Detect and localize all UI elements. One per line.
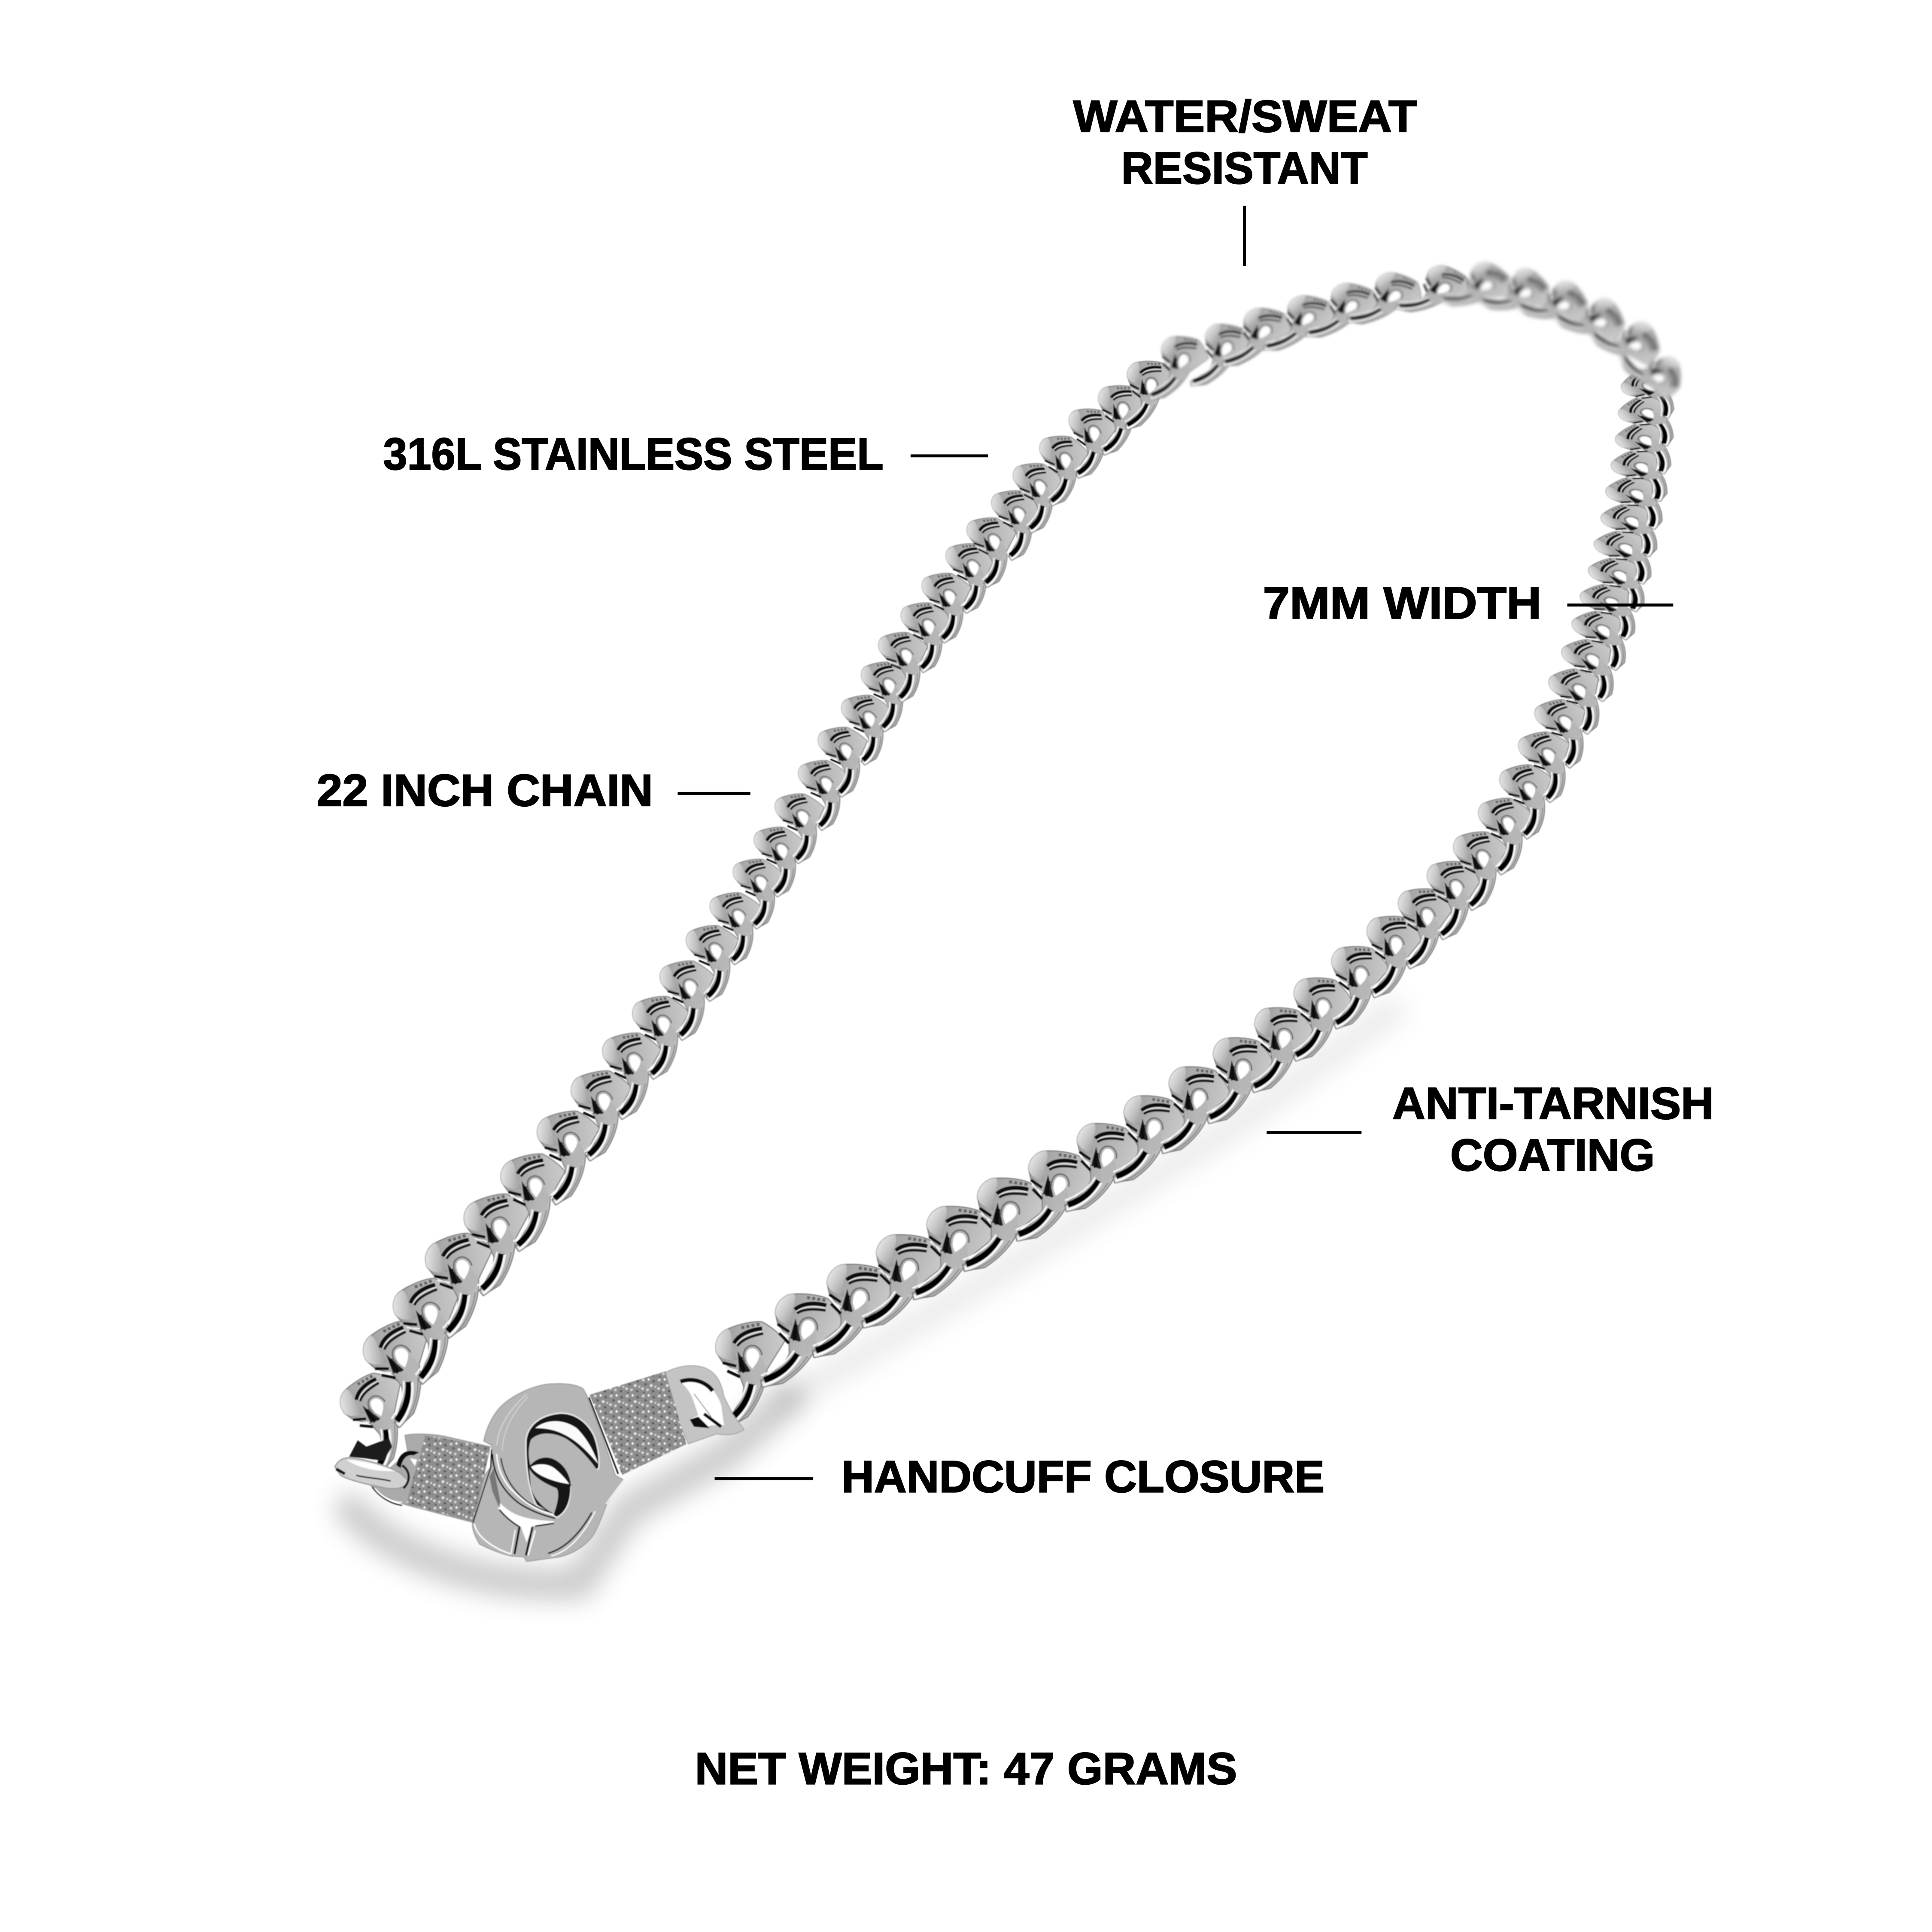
callout: anti-tarnish coating bbox=[1267, 1078, 1714, 1180]
callout: anti-tarnish coating: COATING bbox=[1450, 1130, 1655, 1180]
handcuff rings bbox=[472, 1384, 624, 1561]
clasp soft shadow bbox=[351, 1398, 789, 1584]
chain: right strand bbox=[666, 362, 1702, 1455]
chain soft shadow bbox=[789, 1010, 1392, 1398]
eye highlight bbox=[530, 1464, 570, 1485]
right pad tab and ring opening bbox=[665, 1366, 744, 1444]
callout: anti-tarnish coating: ANTI-TARNISH bbox=[1392, 1078, 1714, 1129]
neck highlight bbox=[498, 1503, 554, 1543]
interlocked ring bbox=[529, 1434, 602, 1520]
ring opening bbox=[526, 1413, 599, 1518]
inner shadow bbox=[489, 1468, 500, 1508]
left textured pad bbox=[406, 1435, 490, 1522]
chain: top curve bbox=[1123, 254, 1482, 425]
net weight caption: NET WEIGHT: 47 GRAMS bbox=[695, 1744, 1237, 1794]
handcuff body bbox=[472, 1384, 623, 1561]
callout: 316L stainless steel: 316L STAINLESS STEEL bbox=[383, 429, 884, 479]
ring bevel lines bbox=[473, 1394, 624, 1556]
end ring link bbox=[335, 1438, 419, 1505]
right textured pad bbox=[589, 1371, 687, 1475]
callout: 7mm width: 7MM WIDTH bbox=[1263, 578, 1541, 629]
white crescent bbox=[535, 1421, 598, 1464]
callout: water/sweat resistant: RESISTANT bbox=[1121, 143, 1368, 194]
front ring lower band bbox=[529, 1468, 558, 1514]
callout: water/sweat resistant: WATER/SWEAT bbox=[1073, 91, 1417, 142]
callout: water/sweat resistant bbox=[1073, 91, 1417, 266]
chain: left strand bbox=[308, 334, 1208, 1488]
callout: handcuff closure: HANDCUFF CLOSURE bbox=[841, 1452, 1324, 1502]
handcuff closure bbox=[335, 1366, 744, 1561]
callout: 22 inch chain: 22 INCH CHAIN bbox=[317, 766, 653, 816]
chain: blurred top right corner bbox=[1438, 252, 1703, 427]
necklace chain bbox=[308, 252, 1703, 1561]
left pad smooth end bbox=[371, 1434, 490, 1522]
